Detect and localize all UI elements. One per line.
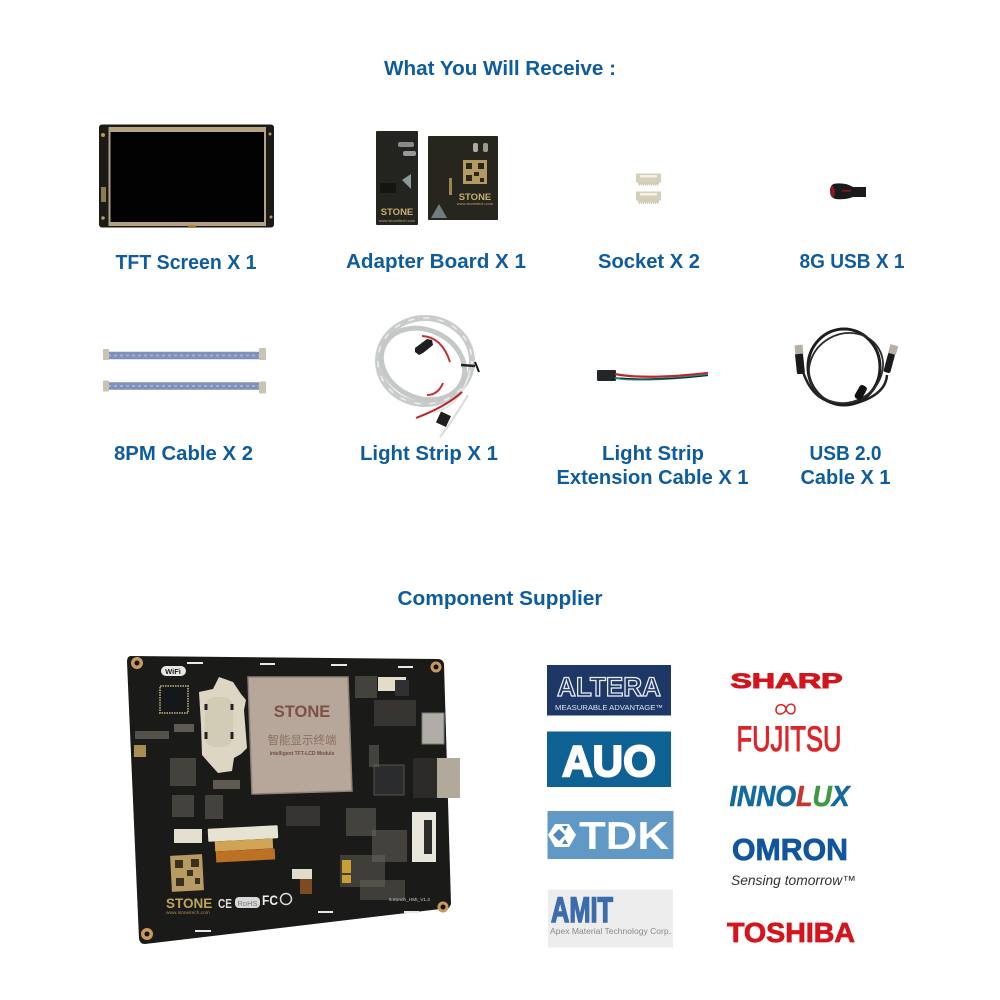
chip shield: STONE [274, 703, 330, 721]
item: adapter board: www.stoneitech.com [379, 218, 416, 223]
logo: Fujitsu [736, 704, 842, 759]
label: 8G USB: 8G USB X 1 [800, 251, 904, 273]
logo: Altera: MEASURABLE ADVANTAGE™ [555, 703, 663, 712]
logo: Innolux: INNOLUX [730, 781, 851, 813]
item: adapter board: STONE [381, 207, 413, 218]
logo: Toshiba: TOSHIBA [727, 917, 855, 948]
item: light strip [370, 315, 479, 437]
edge marks [187, 663, 419, 931]
label: socket: Socket X 2 [598, 251, 700, 273]
board marks: www.stoneitech.com [166, 910, 210, 916]
item: USB stick [830, 183, 866, 199]
logo: Altera [547, 665, 671, 716]
title: what you will receive: What You Will Receive : [384, 58, 616, 80]
logo: Omron: Sensing tomorrow™ [731, 873, 856, 888]
item: sockets [636, 174, 661, 203]
label: TFT screen: TFT Screen X 1 [116, 252, 256, 274]
board marks: STONE [166, 896, 212, 911]
item: TFT screen [99, 124, 274, 228]
label: light strip: Light Strip X 1 [360, 443, 498, 465]
label: USB cable [800, 443, 890, 489]
chip shield: 智能显示终端 [268, 733, 336, 747]
item: extension cable [597, 370, 708, 381]
mounting holes [131, 657, 448, 940]
logo: AUO: AUO [562, 737, 656, 786]
item: adapter board: www.stoneitech.com [457, 201, 494, 206]
item: adapter board [376, 131, 498, 225]
logo: TDK [548, 811, 674, 859]
chip shield [248, 677, 352, 794]
item: 8PM cables [103, 348, 266, 394]
logo: AMIT: AMIT [551, 891, 613, 930]
heading: component supplier: Component Supplier [398, 588, 603, 610]
PCB board photo [127, 656, 460, 944]
board marks: FC [262, 892, 278, 908]
logo: AMIT: Apex Material Technology Corp. [550, 927, 671, 936]
QR code [170, 854, 204, 892]
logo: AUO [547, 732, 671, 787]
logo: Fujitsu: FUJITSU [736, 720, 842, 759]
label: USB cable: USB 2.0 [810, 443, 882, 465]
wifi chip: WiFi [165, 667, 181, 676]
logo: TDK: TDK [579, 815, 669, 858]
component clusters [134, 676, 416, 900]
label: USB cable: Cable X 1 [800, 467, 890, 489]
battery holder [199, 677, 247, 773]
label: 8PM cable: 8PM Cable X 2 [114, 443, 253, 465]
board marks: 5.61nch_HMI_V1.2 [389, 897, 430, 903]
board marks [166, 892, 430, 916]
item: adapter board: STONE [459, 192, 491, 203]
board marks: RoHS [237, 899, 258, 908]
ribbon connector [174, 825, 312, 894]
chip shield: Intelligent TFT-LCD Module [270, 751, 335, 757]
item: USB cable [794, 320, 898, 416]
logo: AMIT [548, 890, 673, 948]
label: extension cable [556, 443, 748, 489]
label: extension cable: Extension Cable X 1 [556, 467, 748, 489]
logo: Altera: ALTERA [557, 672, 661, 702]
label: adapter board: Adapter Board X 1 [346, 251, 526, 273]
logo: Sharp: SHARP [730, 670, 842, 693]
logo: Omron: OMRON [732, 832, 848, 867]
board marks: CE [218, 896, 232, 911]
connectors [374, 677, 444, 862]
label: extension cable: Light Strip [602, 443, 704, 465]
logo: Omron [731, 832, 856, 888]
wifi chip [160, 666, 188, 713]
